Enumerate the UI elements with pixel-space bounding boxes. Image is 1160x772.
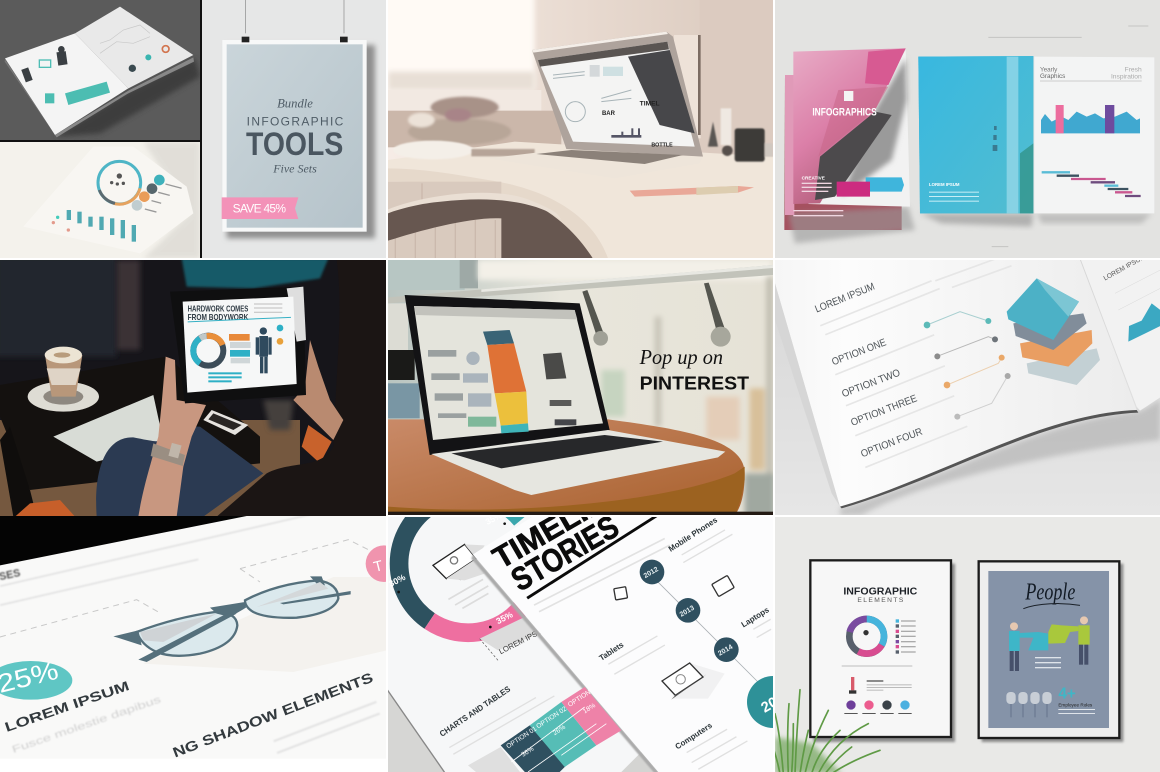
pink cover [793,48,906,204]
left frame: INFOGRAPHIC [843,586,917,597]
camera and tools [708,108,773,162]
timeline: Computers [674,721,714,751]
legend [896,619,899,654]
donut chart: 30% [387,572,407,589]
timeline title: STORIES [505,507,625,598]
legend dots [132,175,182,213]
laptop icon [662,663,725,700]
panel: bundle poster [202,0,386,259]
lorem callout: LOREM IPSUM [497,624,549,656]
right frame: Employee Roles [1058,702,1093,707]
lighthouse [849,677,856,694]
timeline: 20 [759,694,781,716]
Pinterest text: Pop up on [639,345,723,369]
option labels: OPTION ONE [830,337,888,368]
brochure teal figures [45,82,110,105]
panel: laptop on sunny desk [381,0,773,259]
poster clips [242,0,348,42]
circle row [846,700,910,710]
poster sheet [222,40,367,232]
monitor icon [433,544,476,580]
phone [203,410,248,435]
panel: glasses closeup [0,513,402,772]
ring chart [849,619,884,654]
percent circle [0,655,72,700]
chair orange [302,425,332,463]
chair [388,196,593,259]
donut chart: 35% [484,510,504,527]
right frame: People [1025,579,1075,606]
laptop: TIMEL [640,100,660,107]
right frame [979,561,1119,738]
poster title: INFOGRAPHIC [247,114,344,128]
timeline title: TIMELINE [487,473,631,576]
white inner page [808,50,910,207]
Pinterest text [639,345,750,393]
rail [388,265,773,303]
panel: open brochure on dark background [0,0,200,140]
right chart: LOREM IPSUM [1103,254,1147,282]
pink circle [366,545,402,582]
white sheet [473,515,775,772]
tablet [170,287,306,403]
table: 18% [582,702,597,715]
tablet donut [193,336,223,366]
right frame: 4+ [1058,686,1076,703]
option labels: OPTION TWO [840,368,902,400]
panel: framed posters [772,517,1160,772]
save ribbon: SAVE 45% [233,201,286,215]
timeline [598,515,799,770]
plates [393,141,535,159]
laptop deck [431,430,725,495]
pendant lamps [582,283,731,347]
right hand [293,340,343,440]
cover text [844,91,853,101]
right side body [218,457,324,516]
panel: timeline stories [387,473,799,772]
poster title: Five Sets [272,162,317,176]
right blurred background [601,277,775,517]
chart page: Graphics [1040,73,1065,80]
timeline: Tablets [598,640,626,663]
floor [0,420,300,517]
table: OPTION 02 [535,705,568,730]
layered arrow [1007,278,1100,385]
chart page: Fresh [1125,66,1142,73]
chart page: Yearly [1040,66,1058,73]
Pinterest text: PINTEREST [640,372,750,393]
table: 26% [552,724,567,737]
left frame: ELEMENTS [857,597,904,604]
option labels: LOREM IPSUM [814,282,877,315]
jeans [96,427,263,517]
panel: brochure with layered arrow [775,251,1160,515]
tablet boxes [229,334,251,363]
save ribbon [222,197,298,219]
chart page: Inspiration [1111,73,1142,80]
left frame [810,560,951,737]
tablet figure [256,327,272,373]
laptop [502,32,703,164]
blurred body text [0,513,380,754]
lorem ipsum block [3,669,375,760]
table: 36% [520,746,535,759]
brochure people icons [21,46,68,82]
dark curl [815,112,892,200]
pink circle: T [372,558,385,576]
poster title: Bundle [277,96,313,110]
timeline: Laptops [740,605,771,629]
timeline: 2014 [717,644,734,658]
table [388,419,745,515]
poster title: TOOLS [246,126,343,162]
right page [1081,260,1160,411]
saucer and coffee [28,347,99,412]
donut body text [448,579,489,609]
lorem callout [480,615,549,660]
right chart [1103,254,1160,342]
table: OPTION 01 [505,725,538,750]
table: OPTION [567,689,592,709]
donut chart [387,495,521,633]
glasses shadow [143,577,387,672]
pencil [630,186,754,197]
donut ring [98,161,141,204]
lorem ipsum block: LOREM IPSUM [3,678,131,735]
laptop [405,295,725,495]
option labels: OPTION FOUR [859,427,924,460]
clutter pile [408,97,511,145]
glasses [113,576,351,662]
panel: pink and blue magazine [775,0,1160,259]
panel: pink and blue magazine: INFOGRAPHICS [812,106,877,118]
panel: tablet in hands [0,257,387,517]
timeline: Mobile Phones [667,515,719,554]
panel: laptop with Pinterest [388,260,775,517]
tablet: FROM BODYWORK [188,312,248,322]
laptop: BOTTLE [651,143,673,149]
panel: newspaper infographic [0,142,200,259]
tablet bars [208,372,242,382]
table [0,357,260,490]
option labels: OPTION THREE [849,393,919,429]
newspaper [53,395,162,462]
option labels [814,282,924,460]
left page [775,260,1137,507]
bar chart [67,210,136,242]
tablet: HARDWORK COMES [188,304,249,314]
panel: pink and blue magazine: CREATIVE [802,175,825,180]
timeline: 2013 [679,605,696,619]
laptop columns [483,330,514,345]
left stack [784,75,902,230]
table: CHARTS AND TABLES [438,684,513,739]
blue page [918,56,1033,213]
gray description lines [820,251,1014,468]
poster title [246,96,344,176]
donut chart: 35% [494,609,515,626]
chart page [1034,57,1154,213]
panel: glasses closeup: Fusce molestie dapibus [11,694,162,756]
lorem ipsum block: NG SHADOW ELEMENTS [170,669,375,760]
grass [772,690,880,772]
four figures [1006,692,1052,704]
device icons [614,575,734,600]
left arm and hand [138,357,206,517]
brochure line chart [100,25,150,53]
puzzle people [1009,616,1090,671]
laptop: BAR [602,111,616,117]
panel: pink and blue magazine: LOREM IPSUM [929,182,960,187]
timeline: 2012 [643,566,660,580]
sheet edge shadow [471,554,661,772]
table [438,684,621,772]
table [388,142,773,259]
connector lines [927,312,1008,417]
dashed callouts [0,540,368,637]
